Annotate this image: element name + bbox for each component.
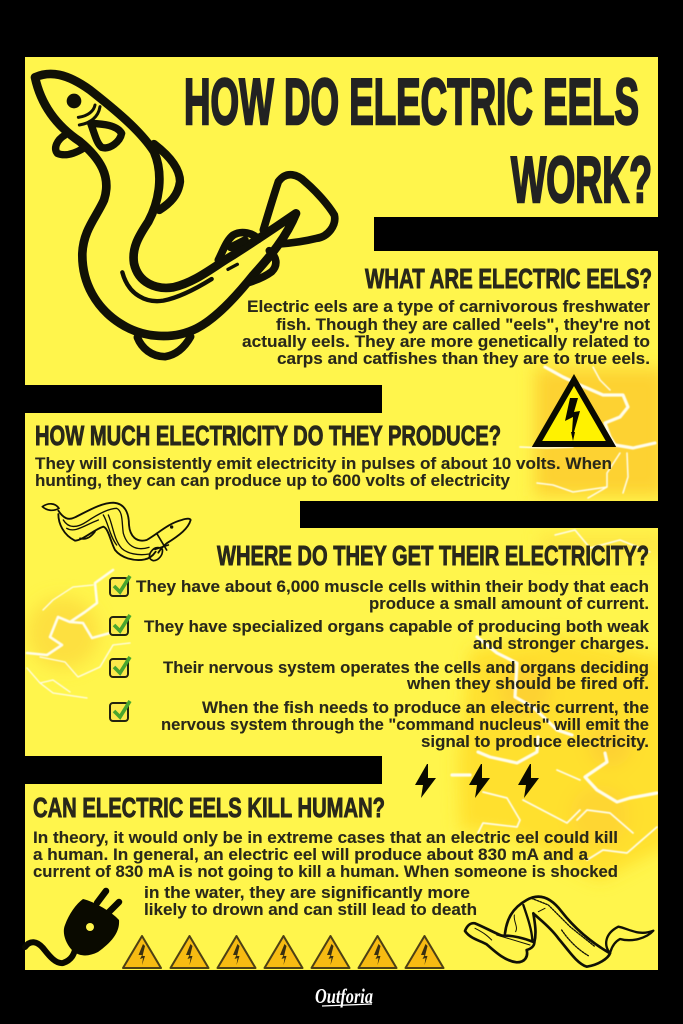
right lightning xyxy=(452,637,657,802)
icon: large eel outline xyxy=(35,74,335,357)
body text: actually eels. They are more genetically related to xyxy=(242,332,650,351)
section: how much electricity xyxy=(35,420,612,490)
body text xyxy=(242,297,650,368)
list item 3: when they should be fired off. xyxy=(406,674,649,693)
icon: high voltage warning triangle xyxy=(537,380,611,444)
heading: CAN ELECTRIC EELS KILL HUMAN? xyxy=(33,792,385,823)
black divider bars xyxy=(0,217,683,784)
body text: Electric eels are a type of carnivorous freshwater xyxy=(247,297,650,316)
list item 1: produce a small amount of current. xyxy=(369,594,649,613)
heading: HOW MUCH ELECTRICITY DO THEY PRODUCE? xyxy=(35,420,501,451)
icon: electric plug xyxy=(25,891,119,963)
list item 3: Their nervous system operates the cells and organs deciding xyxy=(163,658,649,677)
body text: fish. Though they are called "eels", they're not xyxy=(276,315,650,334)
body text xyxy=(33,828,618,919)
list item 2: They have specialized organs capable of producing both weak xyxy=(144,617,650,636)
section: what are electric eels xyxy=(242,263,652,368)
title xyxy=(184,65,652,216)
section: can electric eels kill human xyxy=(33,792,618,919)
icon: small eel illustration xyxy=(42,503,191,561)
body text: They will consistently emit electricity in pulses of about 10 volts. When xyxy=(35,454,612,473)
lightning background textures xyxy=(27,367,670,880)
list item 3 xyxy=(110,657,649,693)
body text: in the water, they are significantly more xyxy=(144,883,470,902)
list item 4: nervous system through the "command nucleus" will emit the xyxy=(161,715,649,734)
body text: hunting, they can can produce up to 600 volts of electricity xyxy=(35,471,511,490)
body text: carps and catfishes than they are to true eels. xyxy=(277,349,650,368)
icon: moray eel illustration xyxy=(465,897,653,967)
logo: Outforia: Outforia xyxy=(315,984,373,1008)
list item 1: They have about 6,000 muscle cells within their body that each xyxy=(136,577,649,596)
section: where do they get their electricity xyxy=(110,540,650,751)
left lightning xyxy=(27,570,113,655)
list item 4: When the fish needs to produce an electric current, the xyxy=(202,698,649,717)
list item 1 xyxy=(110,576,649,613)
body text: a human. In general, an electric eel will produce about 830 mA and a xyxy=(33,845,589,864)
body text: current of 830 mA is not going to kill a human. When someone is shocked xyxy=(33,862,618,881)
body text: likely to drown and can still lead to death xyxy=(144,900,477,919)
body text xyxy=(35,454,612,490)
list item 4: signal to produce electricity. xyxy=(421,732,649,751)
icon: three lightning bolts xyxy=(415,764,539,798)
body text: In theory, it would only be in extreme cases that an electric eel could kill xyxy=(33,828,618,847)
list item 4 xyxy=(110,698,649,751)
icon: row of warning triangles xyxy=(123,936,444,968)
list item 2 xyxy=(110,615,650,653)
list item 2: and stronger charges. xyxy=(473,634,649,653)
